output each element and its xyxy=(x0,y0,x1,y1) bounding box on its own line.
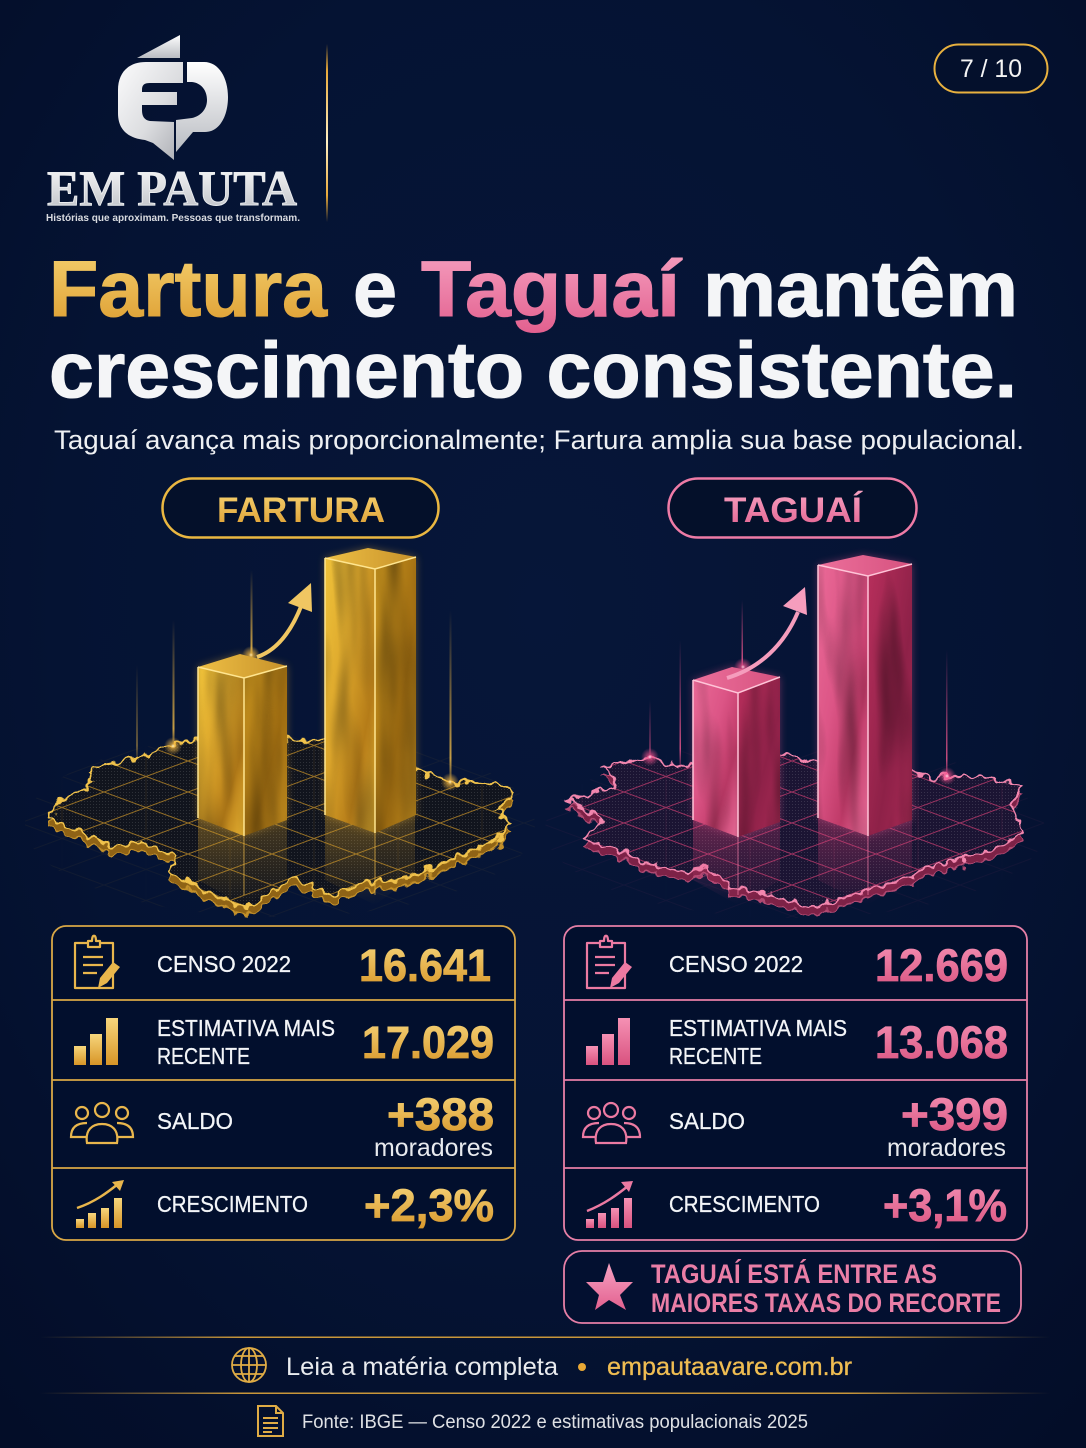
row: estimativa: RECENTE xyxy=(669,1043,762,1069)
bar: Fartura large xyxy=(325,548,416,833)
icon: globe xyxy=(232,1348,266,1382)
bar: Taguaí small xyxy=(693,667,780,837)
icon: clipboard xyxy=(587,936,632,988)
row: crescimento xyxy=(586,1180,1007,1231)
arrow: Taguaí growth xyxy=(727,587,807,678)
footer: read more link: empautaavare.com.br xyxy=(607,1353,852,1381)
row: crescimento: CRESCIMENTO xyxy=(157,1191,308,1217)
row: estimativa: 17.029 xyxy=(362,1017,494,1068)
row: saldo: SALDO xyxy=(669,1108,745,1134)
icon: clipboard xyxy=(75,936,120,988)
icon: star xyxy=(586,1263,633,1310)
row: censo 2022: 16.641 xyxy=(359,940,491,991)
arrow: Fartura growth xyxy=(257,583,312,657)
icon: EP logo mark xyxy=(118,35,228,160)
title xyxy=(49,244,1018,414)
icon: bars xyxy=(74,1018,118,1065)
pill: Fartura: FARTURA xyxy=(217,491,385,530)
logo tagline: Histórias que aproximam. Pessoas que transformam. xyxy=(46,212,300,224)
row: estimativa: 13.068 xyxy=(875,1017,1008,1068)
bar: Fartura small xyxy=(198,654,287,836)
footer: source xyxy=(258,1406,808,1436)
pill: Fartura xyxy=(162,478,438,538)
illustration: Taguaí map and bars xyxy=(545,555,1045,930)
bar: Taguaí large xyxy=(818,555,912,836)
page badge xyxy=(934,44,1048,92)
icon: document xyxy=(258,1406,283,1436)
row: crescimento: +3,1% xyxy=(883,1180,1007,1231)
title: mantêm xyxy=(703,244,1018,333)
row: crescimento: +2,3% xyxy=(364,1180,494,1231)
panel: Taguaí table xyxy=(564,926,1027,1240)
row: censo 2022: CENSO 2022 xyxy=(157,951,291,977)
panel: Fartura table xyxy=(52,926,515,1240)
title: Fartura xyxy=(49,244,328,333)
footer: source: Fonte: IBGE — Censo 2022 e estimativas populacionais 2025 xyxy=(302,1412,808,1433)
pill: Taguaí xyxy=(668,478,916,538)
title: crescimento consistente. xyxy=(49,325,1017,414)
map: Fartura xyxy=(48,734,514,918)
callout: Taguaí highlight xyxy=(564,1251,1021,1323)
panel: logo Em Pauta xyxy=(46,35,300,224)
row: crescimento: CRESCIMENTO xyxy=(669,1191,820,1217)
map: Taguaí xyxy=(564,752,1024,916)
footer: read more link xyxy=(232,1348,852,1382)
subtitle: Taguaí avança mais proporcionalmente; Fartura amplia sua base populacional. xyxy=(54,425,1024,455)
row: saldo: SALDO xyxy=(157,1108,233,1134)
row: censo 2022 xyxy=(75,936,491,991)
row: censo 2022 xyxy=(587,936,1008,991)
illustration: Fartura map and bars xyxy=(25,548,535,930)
icon: people xyxy=(583,1103,640,1143)
footer: read more link: Leia a matéria completa xyxy=(286,1353,558,1381)
row: saldo: moradores xyxy=(374,1134,493,1162)
row: estimativa xyxy=(74,1015,494,1069)
icon: growth chart xyxy=(586,1181,633,1228)
title: Taguaí xyxy=(421,244,683,333)
title: e xyxy=(353,244,397,333)
row: estimativa: ESTIMATIVA MAIS xyxy=(157,1015,335,1041)
page badge: 7 / 10 xyxy=(960,55,1022,83)
row: saldo xyxy=(71,1089,494,1162)
icon: people xyxy=(71,1103,133,1143)
row: crescimento xyxy=(76,1180,494,1231)
row: estimativa: RECENTE xyxy=(157,1043,250,1069)
row: saldo: +399 xyxy=(901,1089,1008,1140)
row: censo 2022: CENSO 2022 xyxy=(669,951,803,977)
row: estimativa: ESTIMATIVA MAIS xyxy=(669,1015,847,1041)
icon: bars xyxy=(586,1018,630,1065)
logo wordmark: EM PAUTA xyxy=(47,160,297,216)
callout: Taguaí highlight: MAIORES TAXAS DO RECORTE xyxy=(651,1288,1001,1318)
row: censo 2022: 12.669 xyxy=(875,940,1008,991)
pill: Taguaí: TAGUAÍ xyxy=(724,490,863,530)
row: estimativa xyxy=(586,1015,1008,1069)
callout: Taguaí highlight: TAGUAÍ ESTÁ ENTRE AS xyxy=(651,1258,937,1289)
row: saldo xyxy=(583,1089,1008,1162)
row: saldo: +388 xyxy=(387,1089,494,1140)
icon: growth chart xyxy=(76,1180,124,1228)
row: saldo: moradores xyxy=(887,1134,1006,1162)
